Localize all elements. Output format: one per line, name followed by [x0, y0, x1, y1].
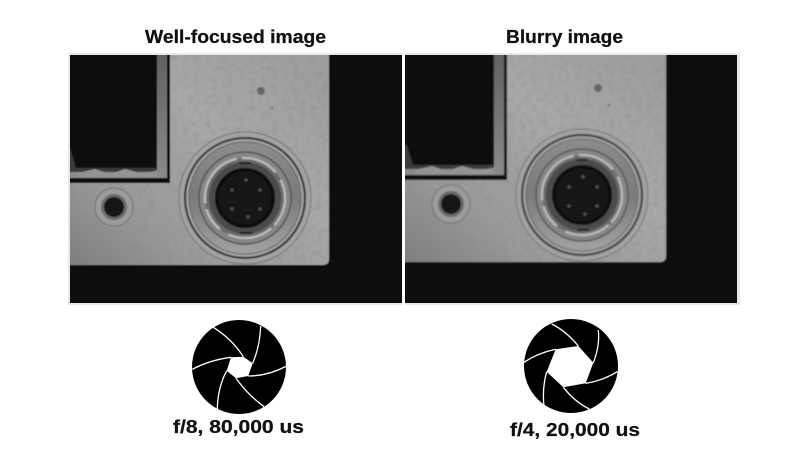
- panel: image frames background: [68, 53, 740, 305]
- panel: well-focused photo of connector plate: [60, 50, 410, 310]
- heading: blurry image: Blurry image: [506, 26, 623, 47]
- icon: aperture f/8, small opening: [192, 320, 287, 414]
- label: f/8 settings: f/8, 80,000 us: [173, 416, 304, 437]
- label: f/4 settings: f/4, 20,000 us: [510, 419, 640, 440]
- heading: well-focused image: Well-focused image: [145, 26, 326, 47]
- icon: aperture f/4, large opening: [524, 319, 618, 413]
- panel: blurry photo of connector plate: [397, 47, 747, 307]
